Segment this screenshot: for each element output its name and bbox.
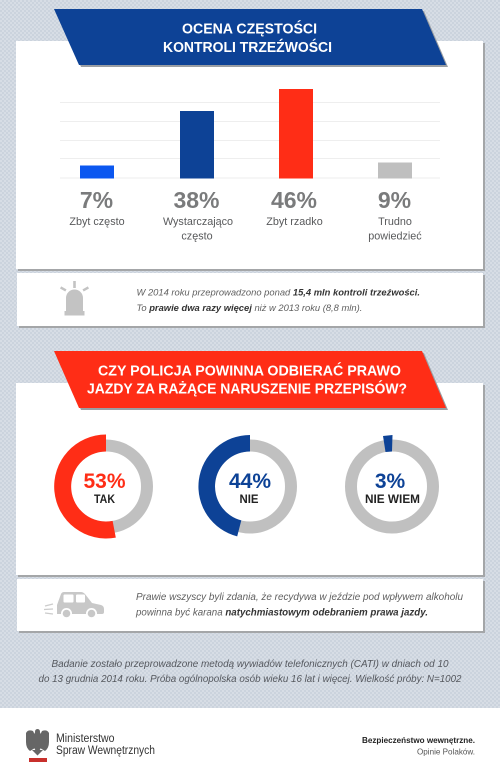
ministry name: Ministerstwo (56, 733, 114, 745)
report label: Bezpieczeństwo wewnętrzne. (362, 735, 475, 745)
value: 9% Trudno powiedzieć (368, 187, 422, 242)
value: 9% Trudno powiedzieć: 9% (378, 187, 411, 213)
value: 9% Trudno powiedzieć: Trudno (378, 216, 412, 228)
value: 7% Zbyt często (69, 187, 125, 228)
callout text: siren: W 2014 roku przeprowadzono ponad 15,4 mln kontroli trzeźwości. (136, 286, 420, 298)
donut: 3% nie wiem (351, 435, 433, 528)
value: 38% Wystarczająco często: 38% (173, 187, 220, 213)
callout text: siren: To prawie dwa razy więcej niż w 2013 roku (8,8 mln). (136, 302, 362, 313)
panel: siren callout (17, 273, 485, 328)
value: 38% Wystarczająco często: często (181, 230, 213, 242)
footer (0, 708, 500, 778)
donut: 44% nie (198, 435, 291, 536)
ministry name: Spraw Wewnętrznych (56, 745, 155, 757)
ministry name (56, 733, 155, 757)
callout text: car: powinna być karana natychmiastowym odebraniem prawa jazdy. (135, 608, 428, 618)
banner: blue heading: KONTROLI TRZEŹWOŚCI (163, 38, 332, 56)
bar chart (60, 89, 440, 178)
panel: bar chart card (16, 41, 485, 271)
panel: car callout (17, 579, 485, 633)
donut: 53% tak (54, 434, 147, 538)
title: OCENA CZĘSTOŚCI (182, 20, 317, 38)
banner: red heading (54, 351, 448, 410)
donut: 53% tak: TAK (94, 492, 115, 506)
value: 9% Trudno powiedzieć: powiedzieć (368, 230, 422, 242)
value: 46% Zbyt rzadko (266, 187, 323, 228)
donut: 44% nie: 44% (229, 470, 271, 493)
value: 38% Wystarczająco często (163, 187, 233, 242)
methodology note: Badanie zostało przeprowadzone metodą wywiadów telefonicznych (CATI) w dniach od 10 (52, 659, 449, 670)
callout text: siren (136, 286, 420, 313)
callout text: car: Prawie wszyscy byli zdania, że recydywa w jeździe pod wpływem alkoholu (136, 592, 463, 603)
value: 38% Wystarczająco często: Wystarczająco (163, 216, 233, 228)
icon: eagle emblem (26, 729, 49, 762)
report label (362, 735, 475, 756)
callout text: car (135, 592, 463, 618)
icon: car (44, 592, 104, 619)
methodology note: do 13 grudnia 2014 roku. Próba ogólnopolska osób wieku 16 lat i więcej. Wielkość próby: N=1002 (38, 674, 462, 685)
value: 46% Zbyt rzadko: 46% (271, 187, 317, 213)
donut: 3% nie wiem: NIE WIEM (365, 492, 420, 506)
title: CZY POLICJA POWINNA ODBIERAĆ PRAWO (98, 362, 401, 380)
value: 46% Zbyt rzadko: Zbyt rzadko (266, 216, 323, 228)
icon: siren (60, 281, 89, 316)
donut: 53% tak: 53% (83, 470, 126, 493)
donut: 44% nie: NIE (240, 492, 258, 506)
methodology note (38, 659, 462, 685)
donut: 3% nie wiem: 3% (375, 470, 405, 493)
report label: Opinie Polaków. (417, 746, 475, 756)
value: 7% Zbyt często: Zbyt często (69, 216, 125, 228)
panel: donut chart card (16, 383, 485, 577)
banner: red heading: JAZDY ZA RAŻĄCE NARUSZENIE PRZEPISÓW? (87, 380, 407, 398)
banner: blue heading (54, 9, 448, 67)
value: 7% Zbyt często: 7% (80, 187, 113, 213)
